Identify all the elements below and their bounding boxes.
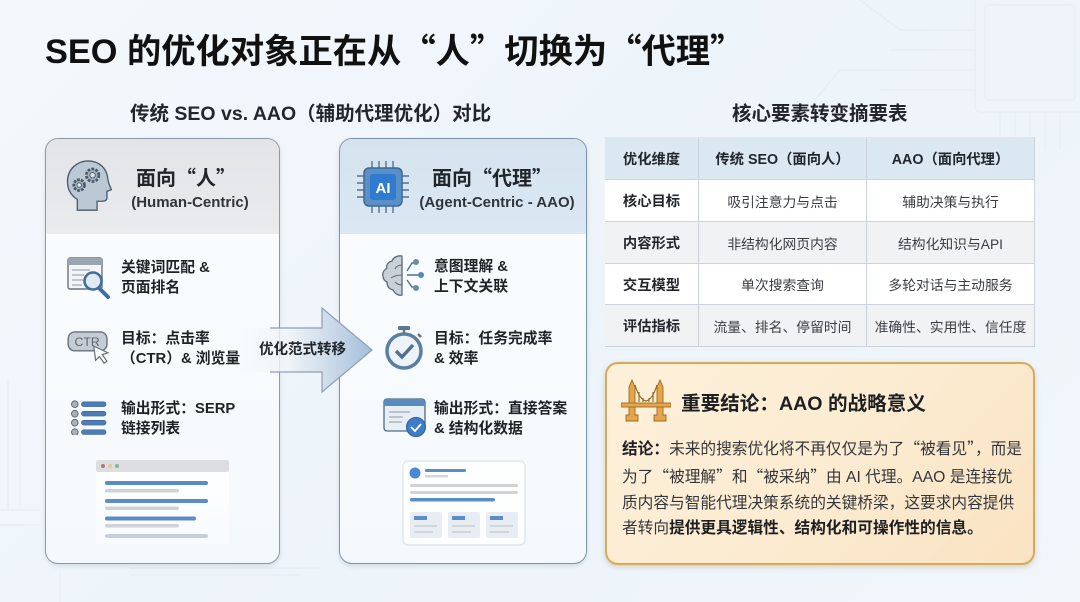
table header row: AAO（面向代理） [892,152,1009,168]
row: interaction model: 多轮对话与主动服务 [888,278,1013,293]
row: content form: 结构化知识与API [898,236,1003,252]
item: CTR target [121,330,240,367]
item: SERP output [121,400,235,437]
row: content form: 非结构化网页内容 [727,236,838,252]
icon: CTR button [68,331,110,364]
row: core goal: 吸引注意力与点击 [727,194,838,210]
icon: stopwatch check [385,326,423,370]
callout body: 者转向提供更具逻辑性、结构化和可操作性的信息。 [622,520,983,537]
icon: list [71,400,106,435]
icon: CTR button: CTR [75,335,100,349]
item: task completion [434,330,552,367]
item: CTR target: 目标：点击率 [121,331,210,347]
row: metrics [605,305,1035,347]
callout body [622,436,1022,537]
heading: comparison: 传统 SEO vs. AAO（辅助代理优化）对比 [130,103,491,125]
row: content form [605,222,1035,264]
callout: conclusion [605,362,1035,565]
table header row: 传统 SEO（面向人） [715,152,850,168]
row: metrics: 评估指标 [623,319,680,335]
row: interaction model: 交互模型 [623,278,680,294]
item: SERP output: 输出形式：SERP [121,401,235,417]
header text: agent: (Agent-Centric - AAO) [419,194,575,211]
panel header: agent [340,139,588,234]
item: task completion: & 效率 [434,351,478,367]
table header row [605,137,1035,180]
callout body: 结论：未来的搜索优化将不再仅仅是为了“被看见”，而是 [622,436,1022,459]
item: keyword matching: 关键词匹配 & [121,260,210,276]
icon: bridge [621,379,671,422]
panel: agent-centric [339,138,587,564]
title: SEO 的优化对象正在从“人”切换为“代理” [45,23,744,73]
item: SERP output: 链接列表 [121,421,180,437]
header text: human [131,162,249,211]
item: direct answers: 输出形式：直接答案 [434,401,567,417]
row: content form: 内容形式 [623,236,680,252]
icon: keyword search window [67,257,110,299]
row: interaction model [605,264,1035,305]
item: task completion: 目标：任务完成率 [434,331,552,347]
item: intent understanding: 意图理解 & [434,259,508,275]
illustration: SERP window [96,460,229,538]
heading: summary table: 核心要素转变摘要表 [732,103,908,125]
item: direct answers: & 结构化数据 [434,421,523,437]
callout heading: 重要结论：AAO 的战略意义 [681,393,926,415]
icon: window with check [383,398,426,437]
row: core goal [605,180,1035,222]
header text: human: 面向“人” [136,162,236,191]
item: CTR target: （CTR）& 浏览量 [121,351,240,367]
callout body: 质内容与智能代理决策系统的关键桥梁，这要求内容提供 [622,495,1014,512]
icon: AI chip [357,161,409,213]
header text: agent [419,162,575,211]
illustration: answer card [402,460,526,546]
row: metrics: 准确性、实用性、信任度 [875,320,1026,334]
row: core goal: 辅助决策与执行 [902,194,999,210]
header text: agent: 面向“代理” [432,162,552,191]
item: keyword matching: 页面排名 [121,280,180,296]
row: core goal: 核心目标 [623,194,680,210]
row: metrics: 流量、排名、停留时间 [714,320,851,334]
arrow: paradigm shift [259,306,373,394]
panel header: human [46,139,281,234]
item: intent understanding: 上下文关联 [434,279,508,295]
icon: head with gears [66,160,112,211]
header text: human: (Human-Centric) [131,194,249,211]
arrow label: 优化范式转移 [259,342,346,358]
item: keyword matching [121,259,210,296]
icon: AI chip: AI [376,180,390,197]
panel: human-centric [45,138,280,564]
callout body: 为了“被理解”和“被采纳”由 AI 代理。AAO 是连接优 [622,464,1012,487]
item: intent understanding [434,258,508,295]
row: interaction model: 单次搜索查询 [741,278,824,293]
icon: brain network [382,255,424,296]
table: summary [605,137,1035,347]
item: direct answers [434,400,567,437]
table header row: 优化维度 [623,152,680,168]
